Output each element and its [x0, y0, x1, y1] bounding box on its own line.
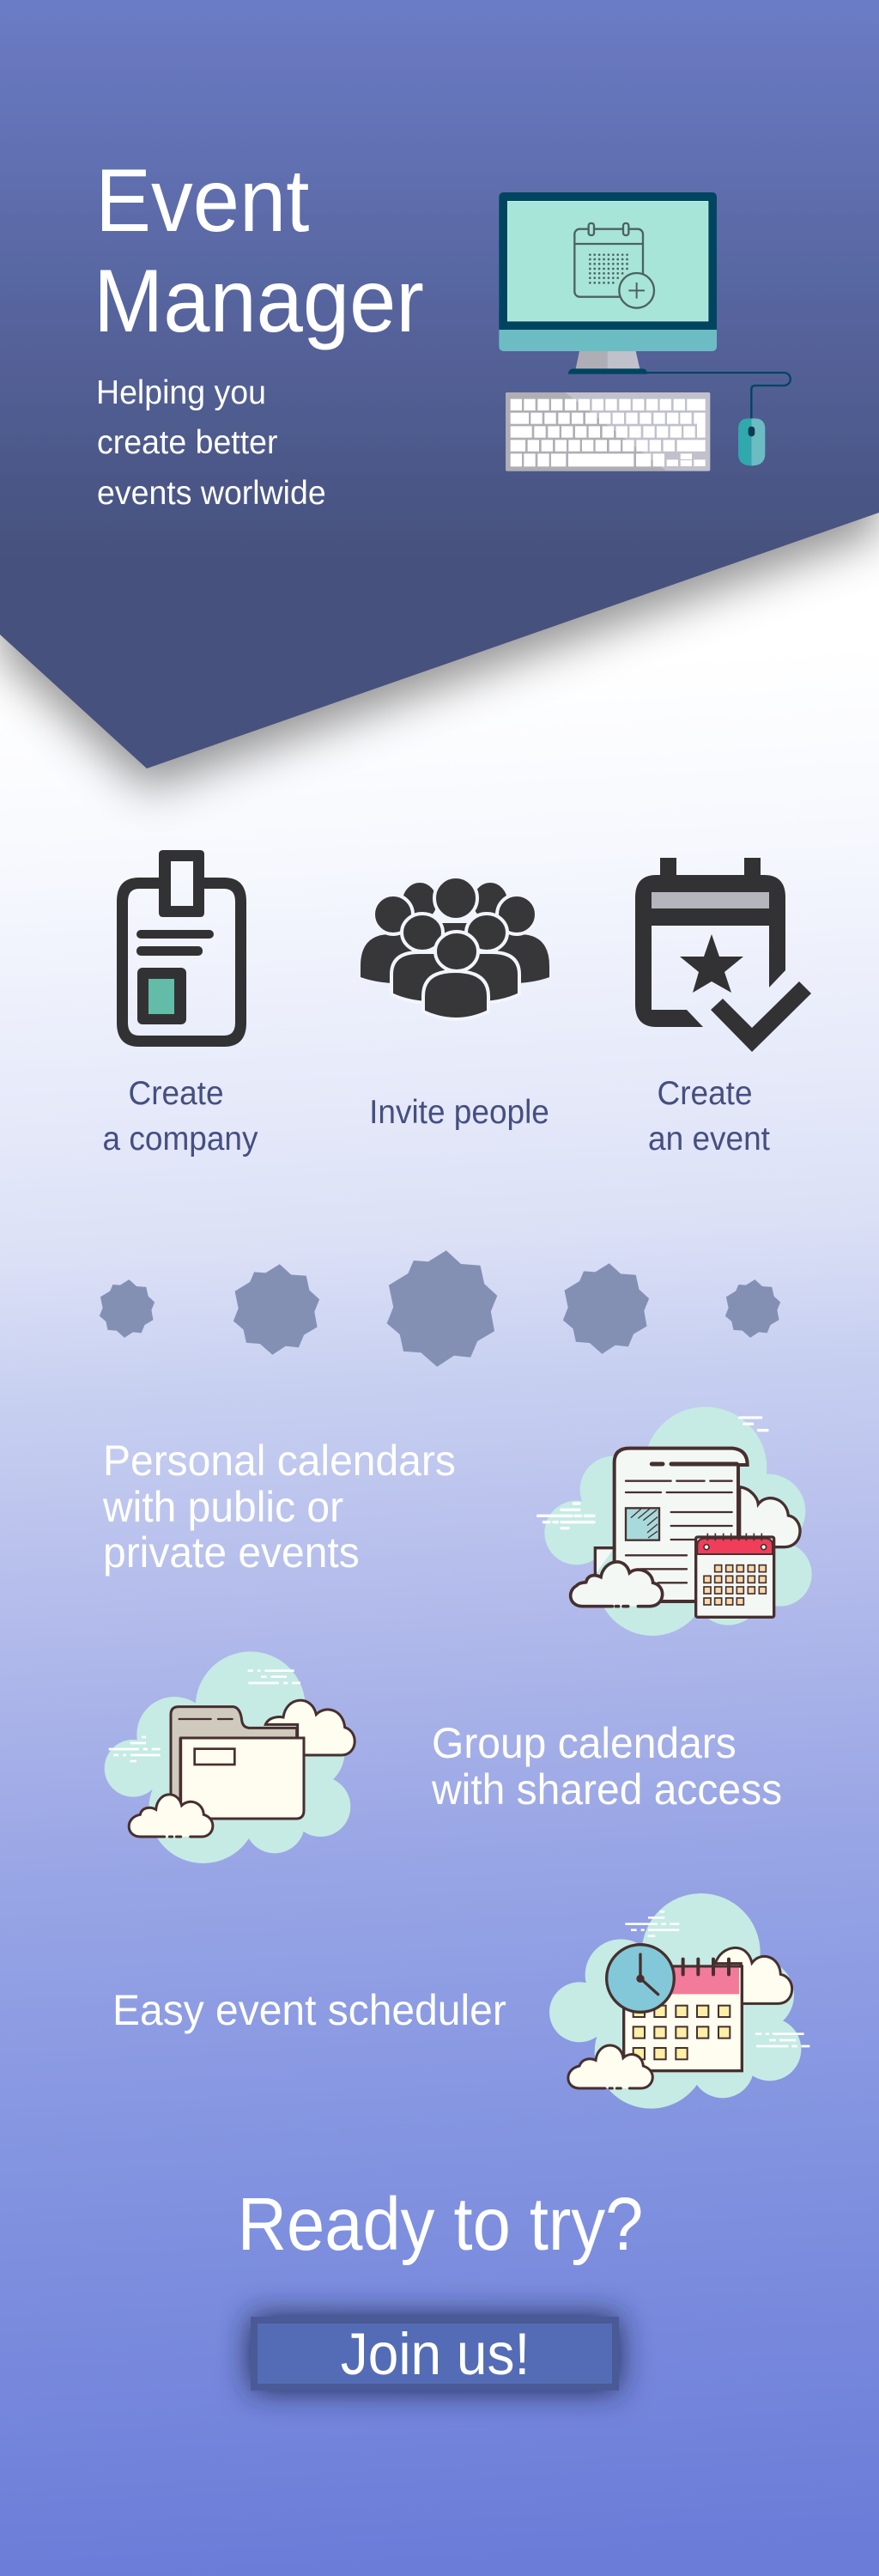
subtitle: create better	[97, 423, 278, 461]
mouse cable	[646, 373, 791, 419]
label: invite people: Invite people	[369, 1093, 549, 1131]
white dashes	[109, 1671, 300, 1761]
label: create an event: an event	[648, 1120, 770, 1157]
white dashes	[625, 1911, 809, 2046]
illustration: calendar and clock in clouds	[549, 1893, 809, 2109]
mint cloud	[105, 1651, 350, 1863]
feature text: personal calendars	[102, 1437, 456, 1577]
call to action heading: Ready to try?	[238, 2181, 643, 2266]
right small cloud	[265, 1700, 355, 1755]
calendar on screen	[574, 223, 654, 308]
icon: event calendar with star and check	[635, 858, 811, 1052]
feature text: group calendars: Group calendars	[432, 1719, 737, 1767]
title: Manager	[94, 252, 424, 351]
feature text: personal calendars: private events	[103, 1528, 360, 1577]
feature text: group calendars	[431, 1719, 782, 1814]
decorative starbursts	[100, 1250, 780, 1367]
clock	[607, 1945, 674, 2012]
wall calendar	[696, 1534, 774, 1617]
calendar	[624, 1959, 742, 2071]
feature text: group calendars: with shared access	[431, 1765, 782, 1814]
label: create a company: Create	[128, 1074, 224, 1112]
illustration: folder in clouds	[105, 1651, 355, 1863]
button: join us	[251, 2317, 619, 2391]
panel: hero header	[0, 0, 879, 769]
subtitle: Helping you	[96, 374, 266, 411]
label: create a company	[103, 1074, 258, 1157]
mint cloud	[549, 1893, 801, 2109]
mint cloud	[544, 1406, 812, 1636]
icon: computer with calendar, keyboard and mouse	[499, 192, 791, 471]
label: create a company: a company	[103, 1120, 258, 1157]
white dashes	[538, 1418, 767, 1528]
icon: group of people	[361, 877, 549, 1019]
subtitle: events worlwide	[97, 474, 326, 512]
feature text: personal calendars: with public or	[102, 1483, 343, 1531]
feature text: easy event scheduler: Easy event scheduler	[112, 1986, 506, 2034]
label: create an event	[648, 1074, 770, 1157]
folder back	[171, 1707, 297, 1803]
right small cloud	[715, 1947, 792, 2003]
button: join us: Join us!	[341, 2322, 530, 2388]
bottom left small cloud	[571, 1562, 663, 1607]
bottom left small cloud	[129, 1795, 213, 1837]
keyboard	[506, 392, 710, 471]
folder details	[179, 1719, 234, 1765]
feature text: personal calendars: Personal calendars	[103, 1437, 456, 1485]
icon: id badge	[117, 850, 246, 1047]
folder front	[181, 1738, 304, 1819]
subtitle	[96, 374, 326, 512]
monitor	[499, 192, 717, 374]
title: Event	[95, 151, 309, 251]
document	[595, 1449, 748, 1601]
mouse	[738, 418, 765, 465]
bottom left small cloud	[568, 2045, 652, 2088]
title	[94, 151, 424, 351]
right small cloud	[740, 1487, 800, 1547]
label: create an event: Create	[657, 1074, 753, 1112]
illustration: document and calendar in clouds	[538, 1406, 812, 1636]
